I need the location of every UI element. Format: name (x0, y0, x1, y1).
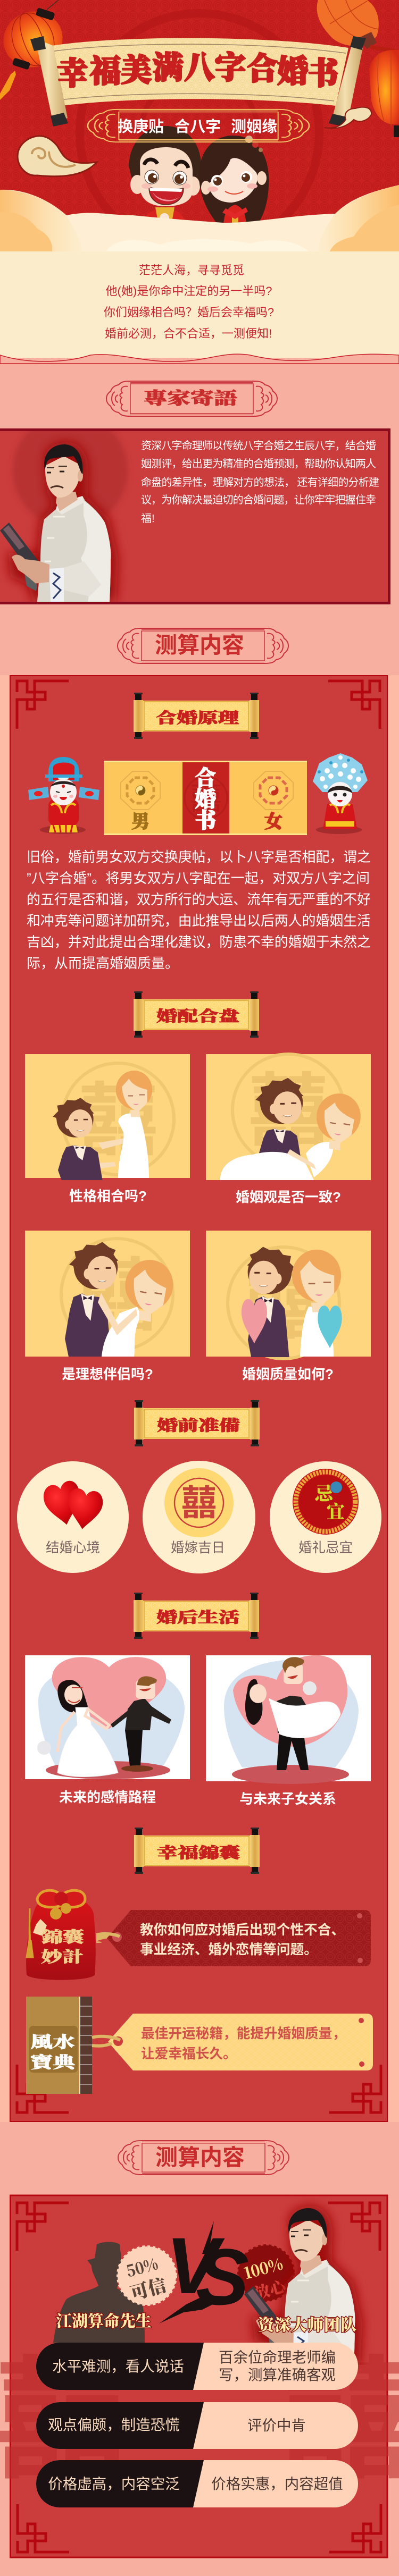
master photo (0, 413, 128, 602)
circle: wedding taboos (270, 1461, 381, 1573)
circle: wedding date (143, 1461, 255, 1573)
heading: content: 测算内容 (155, 633, 244, 658)
header banner (0, 0, 399, 252)
circle: wedding mood (17, 1461, 129, 1573)
heading scroll: match (134, 991, 259, 1038)
margins (0, 675, 399, 2122)
icon: gold cloud left (18, 136, 97, 176)
title text: 幸福美满八字合婚书 (57, 43, 340, 93)
label: master team: 资深大师团队 (258, 2312, 356, 2335)
heading scroll: married life (134, 1593, 259, 1639)
subtitle plaque (88, 110, 309, 142)
VS mark: V (166, 2221, 225, 2310)
intro text: 他(她)是你命中注定的另一半吗? (106, 284, 272, 298)
row 3 (36, 2460, 358, 2507)
principle paragraph: 旧俗，婚前男女双方交换庚帖，以卜八字是否相配，谓之 (27, 849, 371, 865)
row 2: 观点偏颇，制造恐慌 (48, 2417, 180, 2433)
card: ideal partner: 囍 (77, 1251, 157, 1341)
heading: content 2 (0, 2122, 399, 2195)
row 1: 百余位命理老师编 (219, 2349, 336, 2365)
icon: groom doll (28, 757, 99, 834)
badge: 100 percent (238, 2245, 294, 2304)
icon: double happiness: 囍 (181, 1483, 217, 1522)
red centre panel (182, 761, 229, 834)
principle paragraph (27, 849, 371, 971)
heading scroll: principle (134, 693, 259, 739)
label: fortune teller: 江湖算命先生 (56, 2308, 152, 2331)
principle paragraph: 吉凶，并对此提出合理化建议，防患不幸的婚姻于未然之 (27, 934, 371, 950)
icon: fengshui book: 寶典 (30, 2050, 79, 2073)
red centre panel: 书 (195, 804, 217, 834)
card: future love (25, 1655, 190, 1779)
heading scroll: married life: 婚后生活 (156, 1605, 239, 1627)
caption: 与未来子女关系 (239, 1791, 336, 1807)
principle paragraph: 和冲克等问题详加研究，由此推导出以后两人的婚姻生活 (27, 913, 371, 929)
VS mark: S (196, 2232, 249, 2321)
badge: 50 percent (118, 2246, 176, 2305)
caption: 未来的感情路程 (59, 1789, 156, 1805)
badge: 50 percent: 可信 (127, 2271, 169, 2305)
illustration couple (53, 1071, 152, 1180)
card: marriage view (206, 1054, 371, 1180)
left roller (30, 36, 68, 127)
card: ideal partner (25, 1231, 190, 1357)
row 1 (36, 2343, 358, 2390)
groom (129, 126, 201, 225)
tag: tip two: 让爱幸福长久。 (141, 2046, 237, 2061)
caption: 性格相合吗? (69, 1188, 147, 1204)
row 1: 水平难测，看人说话 (52, 2358, 184, 2375)
intro text (104, 264, 274, 340)
master photo 2 (244, 2206, 362, 2365)
panel: comparison (0, 2195, 399, 2557)
heading scroll: tips (134, 1828, 260, 1874)
icon: gold cloud right (325, 107, 371, 128)
row 2: 评价中肯 (247, 2417, 306, 2434)
icon: bagua female (254, 771, 293, 810)
silhouette: fortune teller (53, 2242, 145, 2343)
title scroll (30, 36, 366, 127)
icon: lucky bag: 妙計 (41, 1944, 84, 1966)
circle: wedding date: 婚嫁吉日 (171, 1540, 225, 1555)
row 3: 价格虚高，内容空泛 (48, 2476, 180, 2492)
card: marriage quality (206, 1231, 371, 1359)
heading scroll: preparation (134, 1400, 260, 1446)
icon: fengshui book: 風水 (30, 2030, 75, 2052)
icon: bride doll (313, 753, 368, 834)
expert text (141, 440, 379, 525)
groom (111, 1676, 171, 1772)
expert text: 姻测评，给出更为精准的合婚预测，帮助你认知两人 (141, 458, 376, 470)
illustration couple (65, 1242, 177, 1357)
expert text: 命盘的差异性，理解对方的想法， 还有详细的分析建 (141, 476, 379, 489)
card: personality: 囍 (78, 1076, 158, 1165)
tag: tip two: 最佳开运秘籍，能提升婚姻质量， (141, 2026, 346, 2041)
heading: expert words (106, 381, 277, 416)
icon: double happiness (164, 1468, 234, 1537)
bride and groom cartoon (129, 126, 269, 229)
panel: main content (10, 676, 387, 2122)
tag: tip one: 教你如何应对婚后出现个性不合、 (140, 1922, 345, 1938)
panel: expert words (0, 413, 389, 603)
badge: 100 percent: 放心 (251, 2272, 290, 2304)
row 1: 写，测算准确客观 (219, 2367, 336, 2383)
illustration couple (242, 1247, 342, 1357)
couple (245, 1657, 340, 1770)
intro text: 茫茫人海，寻寻觅觅 (139, 264, 244, 277)
heading scroll: tips: 幸福錦囊 (157, 1841, 240, 1862)
subtitle plaque: 合八字 (174, 118, 221, 136)
caption: 婚姻观是否一致? (236, 1189, 341, 1205)
bride (199, 136, 269, 229)
corner ornaments (17, 681, 381, 2112)
card: marriage view: 囍 (248, 1066, 328, 1156)
tag: tip two (92, 2014, 373, 2070)
heading scroll: principle: 合婚原理 (156, 706, 239, 727)
intro text: 婚前必测，合不合适，一测便知! (105, 327, 272, 340)
lantern left (0, 0, 70, 100)
VS mark (159, 2221, 249, 2324)
icon: hearts (41, 1479, 104, 1532)
icon: medal: 忌 (315, 1479, 335, 1505)
heading: content 2: 测算内容 (155, 2145, 245, 2170)
red centre panel: 囍 (190, 780, 222, 816)
watermark (0, 2346, 399, 2495)
row 3: 价格实惠，内容超值 (211, 2476, 343, 2492)
illustration couple (220, 1078, 364, 1180)
bagua banner (104, 761, 307, 835)
icon: fengshui book (26, 1997, 92, 2094)
intro section (0, 251, 399, 364)
red centre panel: 婚 (195, 782, 216, 813)
icon: lucky bag (26, 1890, 96, 1980)
tag: tip one: 事业经济、婚外恋情等问题。 (140, 1942, 318, 1957)
principle paragraph: 际，从而提高婚姻质量。 (27, 955, 179, 971)
principle paragraph: ”八字合婚”。将男女双方八字配在一起，对双方八字之间 (27, 870, 370, 886)
card: marriage quality: 囍 (244, 1259, 323, 1349)
row 2 (36, 2402, 358, 2449)
expert text: 资深八字命理师以传统八字合婚之生辰八字，结合婚 (141, 440, 376, 452)
expert text: 议，为你解决最迫切的合婚问题，让你牢牢把握住幸 (141, 494, 376, 506)
subtitle plaque: 换庚贴 (118, 118, 164, 136)
circle: wedding taboos: 婚礼忌宜 (298, 1540, 353, 1555)
heading: content (118, 628, 288, 663)
red centre panel: 合 (195, 761, 216, 792)
caption: 婚姻质量如何? (242, 1366, 334, 1382)
icon: medal (293, 1469, 359, 1535)
icon: medal: 宜 (327, 1497, 345, 1523)
bride (37, 1680, 118, 1777)
right roller (329, 36, 366, 127)
card: children (206, 1655, 371, 1784)
badge: 100 percent: 100% (241, 2251, 285, 2284)
heading scroll: match: 婚配合盘 (156, 1004, 239, 1025)
female label: 女 (264, 807, 284, 833)
caption: 是理想伴侣吗? (62, 1366, 153, 1382)
tag: tip one (96, 1910, 371, 1966)
badge: 50 percent: 50% (123, 2251, 160, 2282)
icon: lucky bag: 錦囊 (41, 1925, 84, 1947)
circle: wedding mood: 结婚心境 (46, 1540, 100, 1555)
clouds (0, 185, 399, 251)
subtitle plaque: 测姻缘 (231, 118, 277, 136)
expert text: 福! (141, 512, 155, 525)
male label: 男 (131, 807, 149, 833)
card: personality (25, 1054, 190, 1180)
icon: bagua male (121, 771, 160, 810)
heading: expert words: 專家寄語 (144, 385, 238, 409)
principle paragraph: 的五行是否和谐，双方所行的大运、流年有无严重的不好 (27, 891, 371, 907)
intro text: 你们姻缘相合吗？婚后会幸福吗? (104, 306, 274, 319)
heading scroll: preparation: 婚前准備 (157, 1413, 240, 1435)
corner ornaments (17, 2203, 381, 2552)
lanterns right (317, 0, 399, 137)
